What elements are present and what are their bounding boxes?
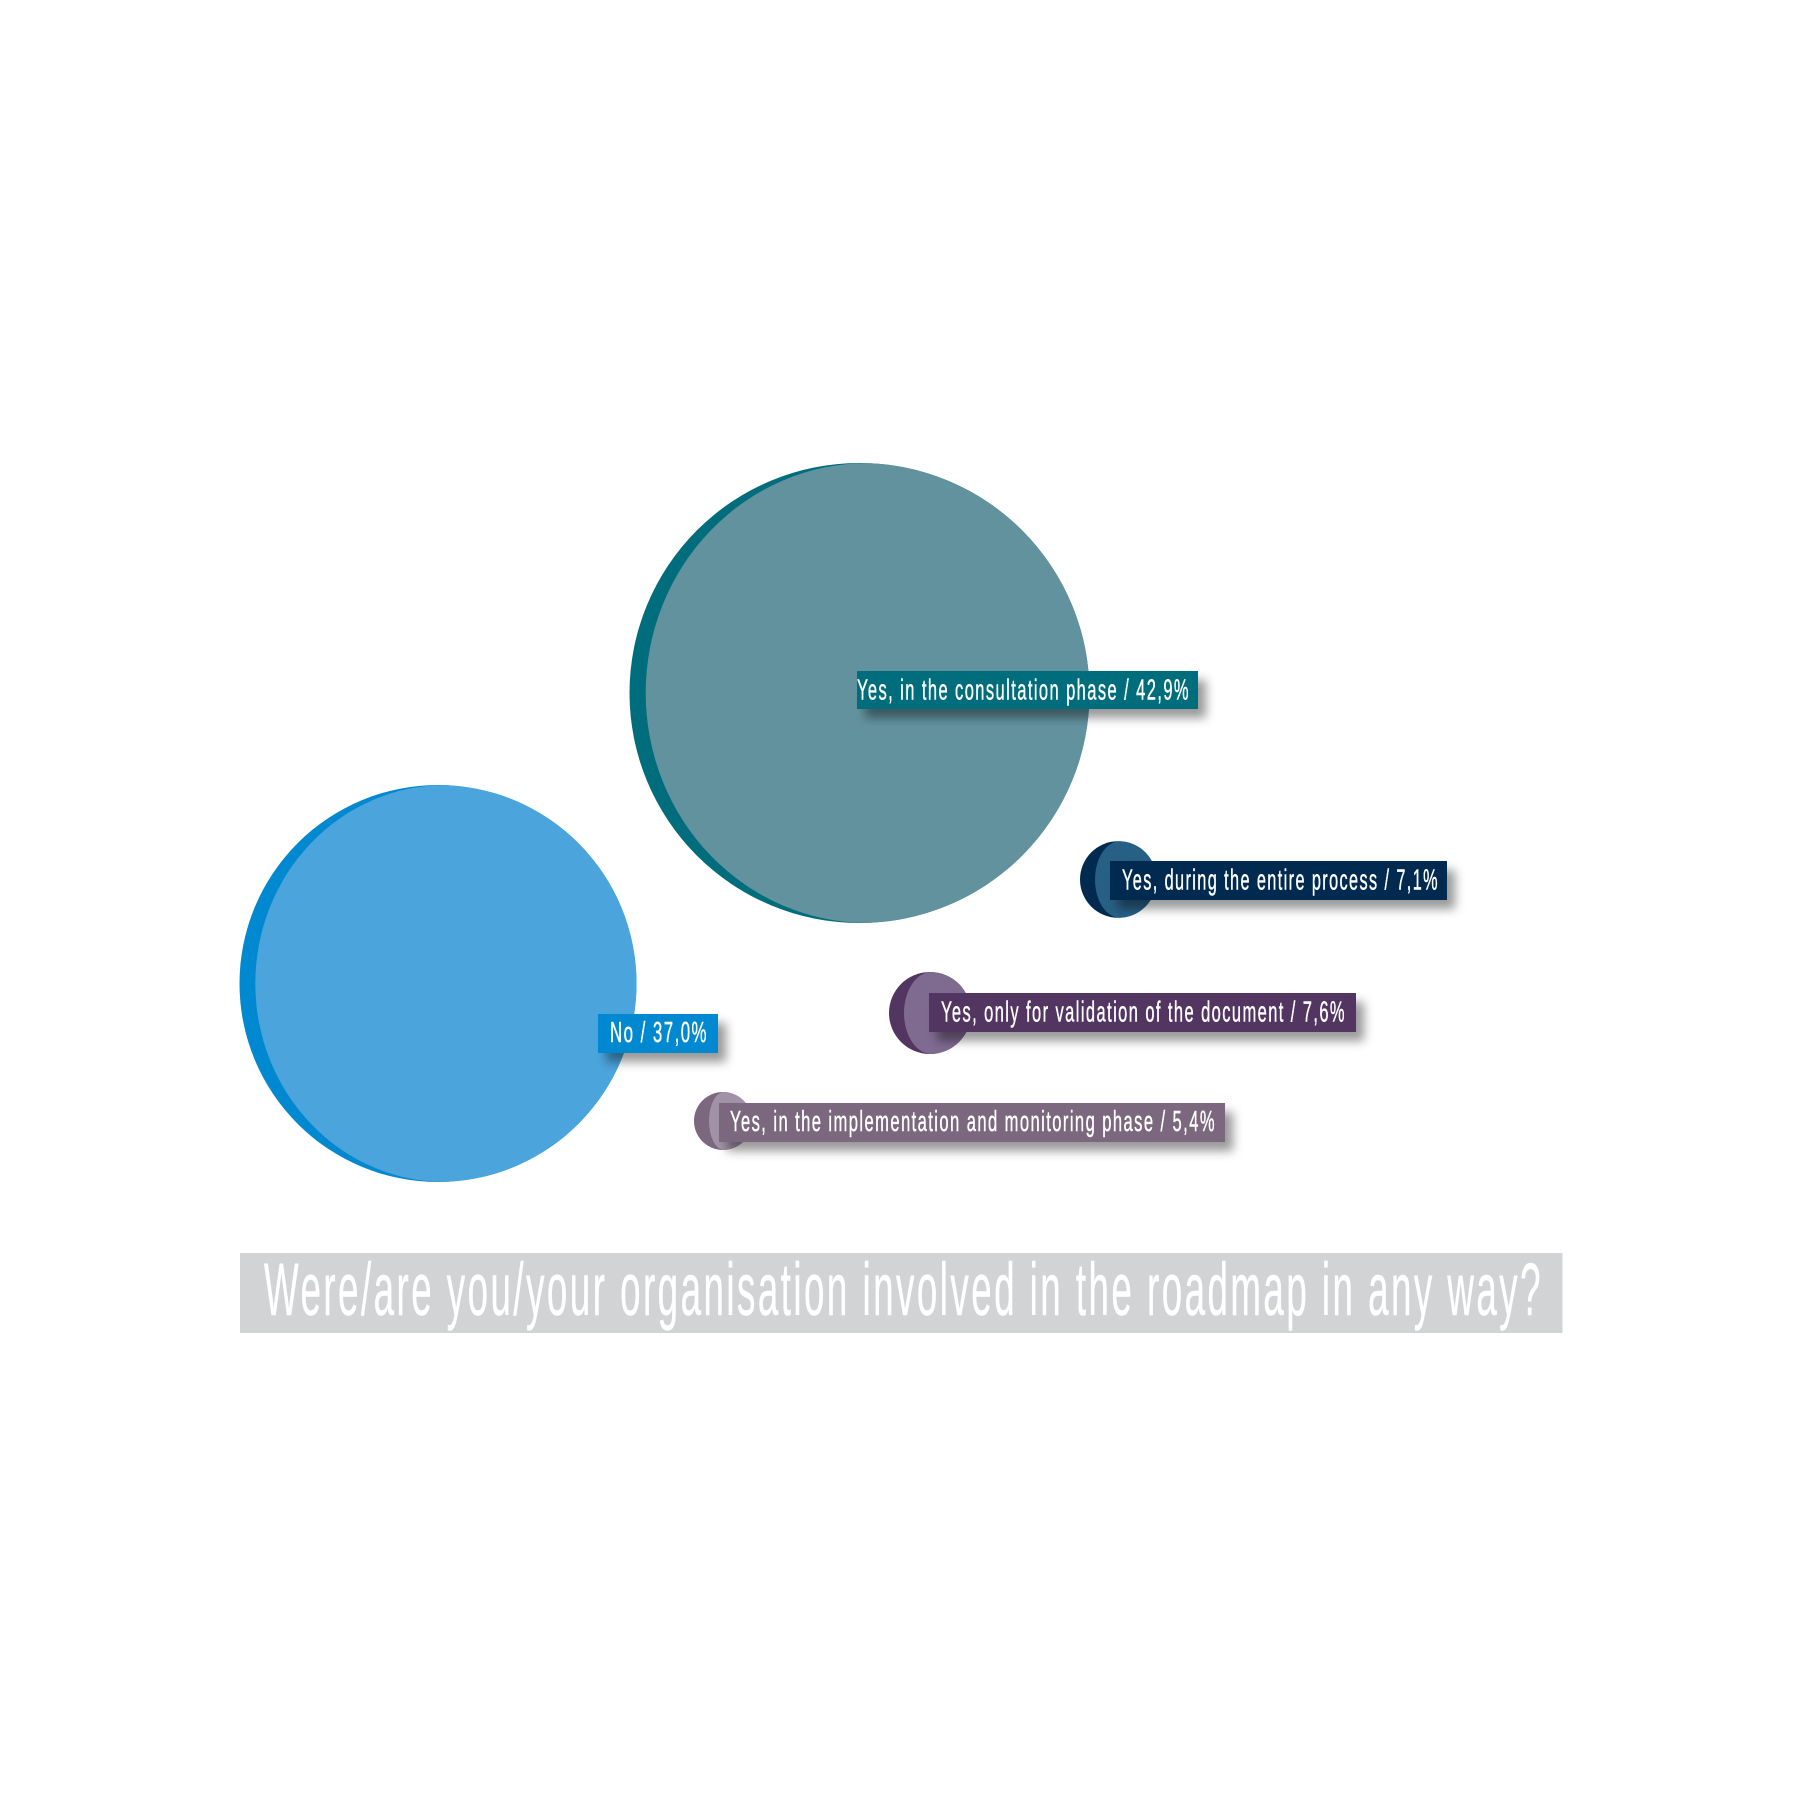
bubble: entire process 7,1% (1080, 841, 1157, 918)
bubble: no 37,0% (240, 785, 636, 1182)
label: implementation and monitoring phase (719, 1103, 1225, 1142)
label: consultation phase: Yes, in the consultation phase / 42,9% (857, 674, 1190, 706)
label: implementation and monitoring phase: Yes, in the implementation and monitoring phase / 5,4% (730, 1106, 1216, 1138)
label: consultation phase (857, 671, 1198, 709)
bubble: validation of the document 7,6% (889, 972, 971, 1054)
bubble: implementation and monitoring phase 5,4% (694, 1092, 752, 1150)
label: no: No / 37,0% (610, 1017, 708, 1049)
label: validation of the document: Yes, only for validation of the document / 7,6% (941, 996, 1346, 1028)
label: validation of the document (929, 993, 1356, 1032)
label: entire process (1110, 861, 1447, 900)
bubble: consultation phase 42,9% (630, 463, 1090, 923)
label: entire process: Yes, during the entire process / 7,1% (1122, 864, 1439, 896)
label: no (598, 1014, 718, 1053)
